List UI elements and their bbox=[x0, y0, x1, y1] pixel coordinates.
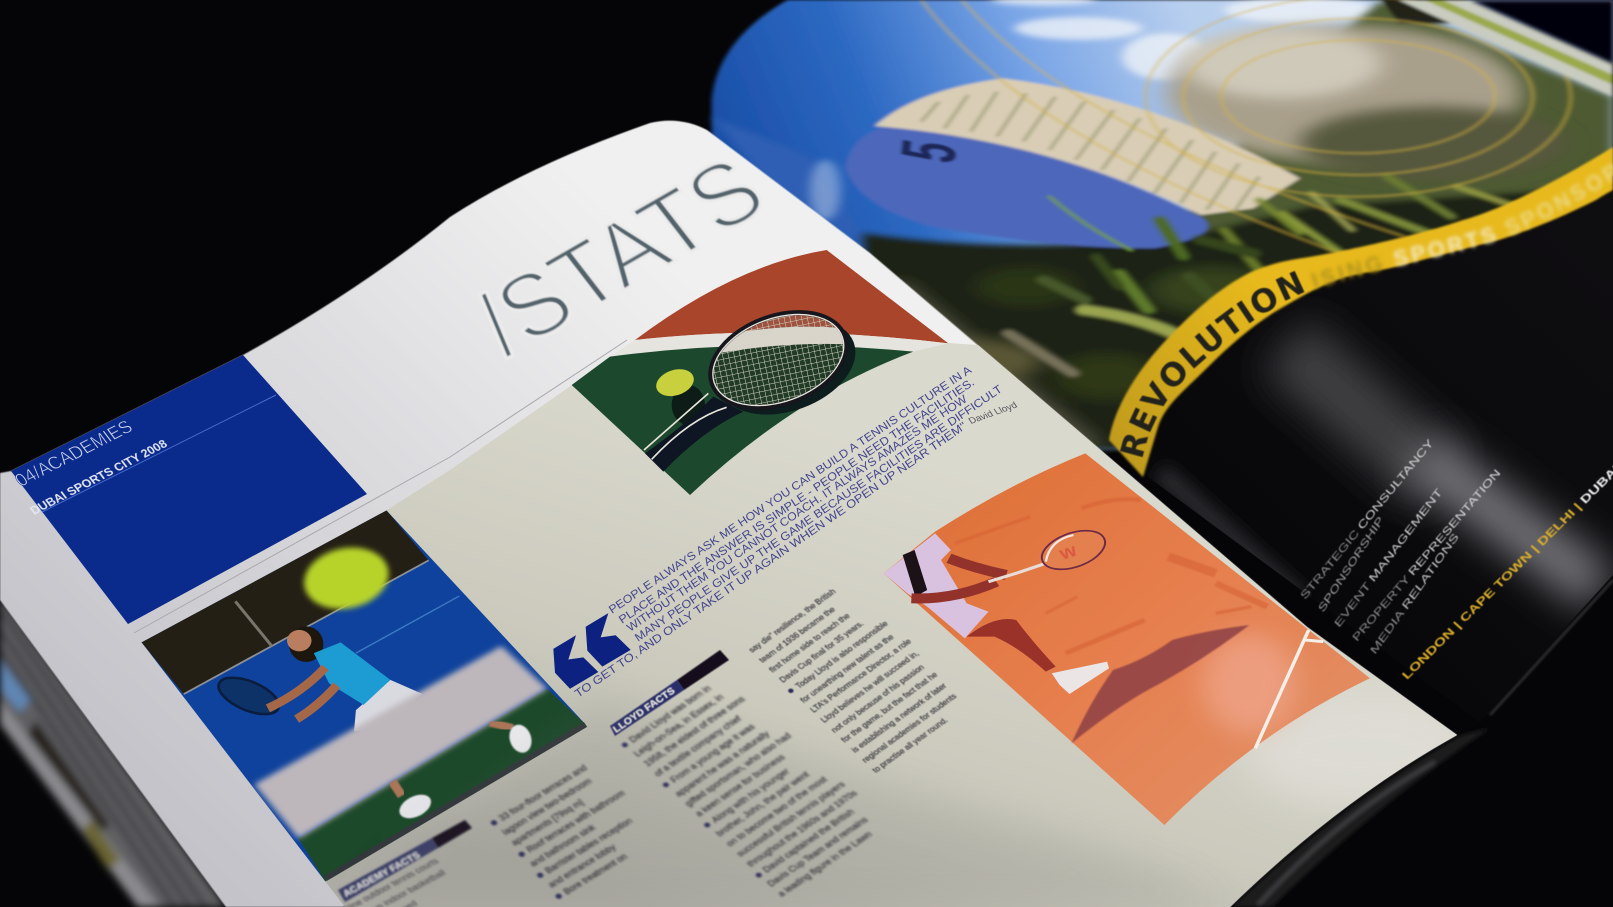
hairline below header bbox=[134, 340, 627, 633]
heading: stats: /STATS bbox=[455, 139, 784, 375]
book cover edge bbox=[1232, 728, 1490, 907]
quote line 1: PEOPLE ALWAYS ASK ME HOW YOU CAN BUILD A TENNIS CULTURE IN A bbox=[607, 364, 974, 616]
clay court area bbox=[635, 250, 948, 343]
photo: grass blades bbox=[1009, 177, 1515, 373]
panel: right page golf photo bbox=[712, 0, 1613, 450]
column copy: From a young age it was bbox=[668, 722, 757, 784]
column copy: on to become two of the most bbox=[724, 775, 829, 848]
player shoe bbox=[1052, 662, 1109, 694]
office cities: LONDON | CAPE TOWN | DELHI | DUBAI bbox=[1400, 463, 1613, 682]
dark fence bbox=[142, 510, 429, 694]
photo: sky bbox=[712, 0, 1613, 450]
racket handle bbox=[645, 397, 743, 472]
photo: clay court player bbox=[884, 453, 1370, 825]
photo: ball lower shade bbox=[1300, 107, 1568, 180]
ball shadow bbox=[672, 385, 705, 425]
photo: pale reflection bbox=[810, 160, 840, 220]
wall lines bbox=[356, 596, 459, 653]
bar blue part bbox=[610, 680, 684, 736]
player: hair bbox=[289, 626, 323, 662]
column copy: Lloyd believes he will succeed in, bbox=[819, 649, 921, 724]
player: far leg bbox=[490, 723, 513, 728]
bar label: ACADEMY FACTS bbox=[341, 850, 423, 899]
player shadow bbox=[1071, 625, 1249, 743]
column copy: Davis Cup Team and remains bbox=[765, 815, 870, 889]
player leg bbox=[967, 619, 1056, 672]
interior white bbox=[721, 326, 843, 353]
photo: gold arcs overlay bbox=[921, 0, 1571, 253]
second mark bbox=[586, 613, 631, 667]
black page surface bbox=[1125, 170, 1613, 722]
number on golf club: 5 bbox=[885, 135, 973, 168]
column copy: David captained the British bbox=[761, 807, 856, 875]
photo: club sole bbox=[846, 125, 1208, 248]
column copy: Davis Cup final for 35 years. bbox=[778, 619, 866, 684]
racket head bbox=[1035, 523, 1112, 577]
blurred ball in foreground bbox=[297, 539, 396, 617]
pull quote bbox=[573, 364, 1020, 700]
stack stripes bbox=[0, 610, 205, 907]
stack dark page bbox=[24, 720, 110, 840]
blue block bbox=[11, 355, 367, 624]
quotation marks bbox=[553, 613, 631, 689]
player: near shoe bbox=[395, 790, 436, 823]
wall top line bbox=[184, 560, 429, 694]
column copy: apparent he was a naturally bbox=[673, 729, 772, 798]
photo: ball highlight bbox=[1183, 28, 1381, 98]
column copy: apartments [79sq m] bbox=[509, 797, 585, 848]
stack base bbox=[0, 596, 226, 907]
column copy: David Lloyd was born in bbox=[627, 684, 713, 744]
service: media relations: MEDIA RELATIONS bbox=[1369, 532, 1461, 657]
panel: left page bbox=[0, 121, 1457, 907]
racket handle bbox=[988, 563, 1046, 582]
column copy: say die" resilience, the British bbox=[747, 587, 838, 654]
ribbon shape bbox=[1109, 147, 1613, 477]
column copy: team of 1936 became the bbox=[757, 605, 838, 664]
service: strategic consultancy: STRATEGIC CONSULTANCY bbox=[1299, 438, 1436, 602]
photo: upper right grass bbox=[1178, 0, 1613, 273]
photo: dark grass ground bbox=[863, 187, 1613, 450]
column copy: successful British tennis players bbox=[735, 779, 847, 859]
blue wall bbox=[142, 510, 586, 881]
bullets bbox=[490, 819, 563, 900]
bar black part bbox=[677, 650, 729, 690]
text column: continuation bbox=[745, 577, 976, 776]
court lines bbox=[1255, 630, 1323, 748]
panel: blue section tab bbox=[11, 355, 367, 624]
bullets bbox=[621, 742, 763, 878]
photo: racket and ball on court bbox=[572, 250, 948, 495]
fence post bbox=[235, 601, 272, 646]
text column: apartments bbox=[488, 757, 664, 901]
column copy: for the game, but the fact that he bbox=[840, 670, 940, 744]
photo: page edge strip bbox=[1399, 0, 1613, 97]
racket shadow bbox=[706, 301, 869, 432]
corner: background beyond right page bbox=[1470, 0, 1613, 64]
column copy: and entrance lobby bbox=[546, 842, 618, 890]
panel: black right page bbox=[1125, 170, 1613, 722]
bar black part bbox=[432, 820, 472, 848]
services list bbox=[1299, 438, 1613, 682]
photo: sharp grass blade bbox=[1049, 197, 1131, 250]
player arms bbox=[911, 558, 1006, 598]
section subtitle: DUBAI SPORTS CITY 2008 bbox=[27, 437, 170, 517]
text column: academy facts bbox=[342, 856, 470, 907]
column copy: is establishing a network of later bbox=[850, 682, 949, 754]
first mark bbox=[553, 635, 598, 689]
bullet bbox=[787, 688, 795, 694]
player: arms bbox=[268, 667, 337, 719]
green court bbox=[299, 689, 586, 881]
tennis ball bbox=[653, 365, 697, 401]
heading bar: academy facts bbox=[338, 820, 472, 902]
column copy: and bathroom sink bbox=[528, 822, 598, 869]
column copy: brother, John, the pair went bbox=[714, 770, 812, 838]
rule on blue block bbox=[42, 395, 276, 512]
column copy: not only because of his passion bbox=[829, 663, 926, 734]
cover highlight line bbox=[1258, 762, 1435, 905]
player: racket bbox=[213, 670, 285, 722]
cover strip bbox=[1232, 728, 1490, 907]
column copy: gifted sportsman, who also had bbox=[683, 731, 793, 808]
racket frame bbox=[698, 295, 859, 425]
quote attribution: David Lloyd bbox=[967, 400, 1020, 426]
page rim bbox=[1490, 580, 1613, 715]
player: far shoe bbox=[506, 722, 535, 755]
player: face bbox=[287, 630, 312, 651]
photo: dark wedge behind ball bbox=[1381, 0, 1457, 23]
interior base bbox=[714, 329, 843, 404]
sheen highlight on black page bbox=[1160, 345, 1600, 600]
green court area bbox=[572, 345, 913, 495]
racket rim highlight bbox=[1046, 535, 1073, 562]
white court line bbox=[610, 332, 948, 357]
column copy: regional academies for students bbox=[860, 692, 958, 765]
column copy: Leigh-on-Sea, in Essex, in bbox=[632, 692, 725, 758]
photo: woman playing backhand on blue court bbox=[142, 510, 586, 881]
column copy: of a textile company chief bbox=[652, 714, 744, 778]
stack yellow hint bbox=[82, 820, 120, 870]
racket head interior bbox=[714, 316, 843, 404]
column copy: first home side to reach the bbox=[768, 611, 853, 674]
player: shirt bbox=[314, 642, 390, 705]
service: property representation: PROPERTY REPRESENTATION bbox=[1351, 468, 1503, 644]
quote line 4: MANY PEOPLE GIVE UP THE GAME BECAUSE FACILITIES ARE DIFFICULT bbox=[633, 383, 1005, 644]
text column: lloyd facts bbox=[619, 668, 890, 900]
player clothing bbox=[884, 533, 988, 638]
column copy: Bore treatment on bbox=[561, 851, 629, 896]
interior clay bbox=[744, 315, 836, 332]
column copy: Today Lloyd is also responsible bbox=[794, 619, 890, 690]
photo: gutter brown strip bbox=[886, 287, 1084, 450]
panel: beige content area bbox=[325, 343, 1457, 907]
page stack at left bbox=[0, 596, 226, 907]
clay surface bbox=[884, 453, 1370, 825]
column copy: Barrister tables reception bbox=[543, 816, 634, 875]
photo: lower grass patches bbox=[915, 267, 1277, 400]
player: skirt bbox=[354, 680, 423, 732]
column copy: Roof terraces with bathroom bbox=[524, 788, 627, 854]
photo: blurred golf ball bbox=[1166, 25, 1521, 162]
blurred net band bbox=[254, 646, 547, 839]
quote line 3: WITHOUT THEM YOU CANNOT COACH. IT ALWAYS AMAZES ME HOW bbox=[625, 393, 970, 634]
column copy: throughout the 1960s and 1970s bbox=[745, 788, 859, 869]
photo: green edge stripe bbox=[1425, 0, 1613, 85]
player waistband bbox=[903, 550, 927, 597]
section title: 04/ACADEMIES bbox=[11, 417, 137, 491]
strings bbox=[714, 316, 843, 404]
yellow ribbon band bbox=[28, 146, 1613, 518]
service: sponsorship: SPONSORSHIP bbox=[1317, 515, 1386, 615]
ribbon text: revolution: REVOLUTION bbox=[1120, 270, 1305, 458]
photo: club grooves bbox=[921, 92, 1259, 213]
column copy: Along with his younger bbox=[709, 766, 791, 825]
column copy: to practise all year round. bbox=[871, 716, 950, 775]
clay texture bbox=[955, 499, 1267, 653]
depth shadow on lower spread bbox=[420, 712, 1165, 900]
heading bar: lloyd facts bbox=[610, 650, 729, 736]
quote line 5: TO GET TO, AND ONLY TAKE IT UP AGAIN WHEN WE OPEN UP NEAR THEM" bbox=[573, 420, 969, 700]
service: event management: EVENT MANAGEMENT bbox=[1333, 486, 1446, 630]
quote line 2: PLACE AND THE ANSWER IS SIMPLE - PEOPLE NEED THE FACILITIES. bbox=[617, 377, 977, 626]
photo: club face bbox=[875, 78, 1300, 215]
stack pale edge bbox=[0, 700, 160, 907]
shaft highlights bbox=[644, 393, 727, 459]
player: near leg bbox=[392, 781, 402, 796]
racket logo: w bbox=[1055, 540, 1081, 565]
column copy: 33 four-floor terraces and bbox=[497, 763, 589, 823]
column copy: lagoon view two-bedroom bbox=[500, 776, 594, 837]
photo: left lower shaded blue bbox=[712, 117, 875, 253]
photo: clouds bbox=[991, 0, 1376, 80]
stack coloured pages bbox=[0, 660, 30, 712]
beige light falloff bbox=[1240, 690, 1480, 810]
court edge bbox=[325, 724, 586, 878]
bar label: LLOYD FACTS bbox=[611, 686, 677, 735]
column copy: 1958, the eldest of three sons bbox=[642, 694, 747, 768]
column copy: LTA's Performance Director, a role bbox=[809, 637, 914, 714]
column copy: a keen sense for business bbox=[693, 752, 787, 818]
column copy: a leading figure in the Lawn bbox=[776, 829, 874, 899]
bar blue part bbox=[338, 838, 438, 902]
column copy: for unearthing new talent as the bbox=[798, 632, 896, 704]
racket rim highlight bbox=[700, 298, 856, 422]
pale wear area bbox=[1202, 633, 1297, 733]
